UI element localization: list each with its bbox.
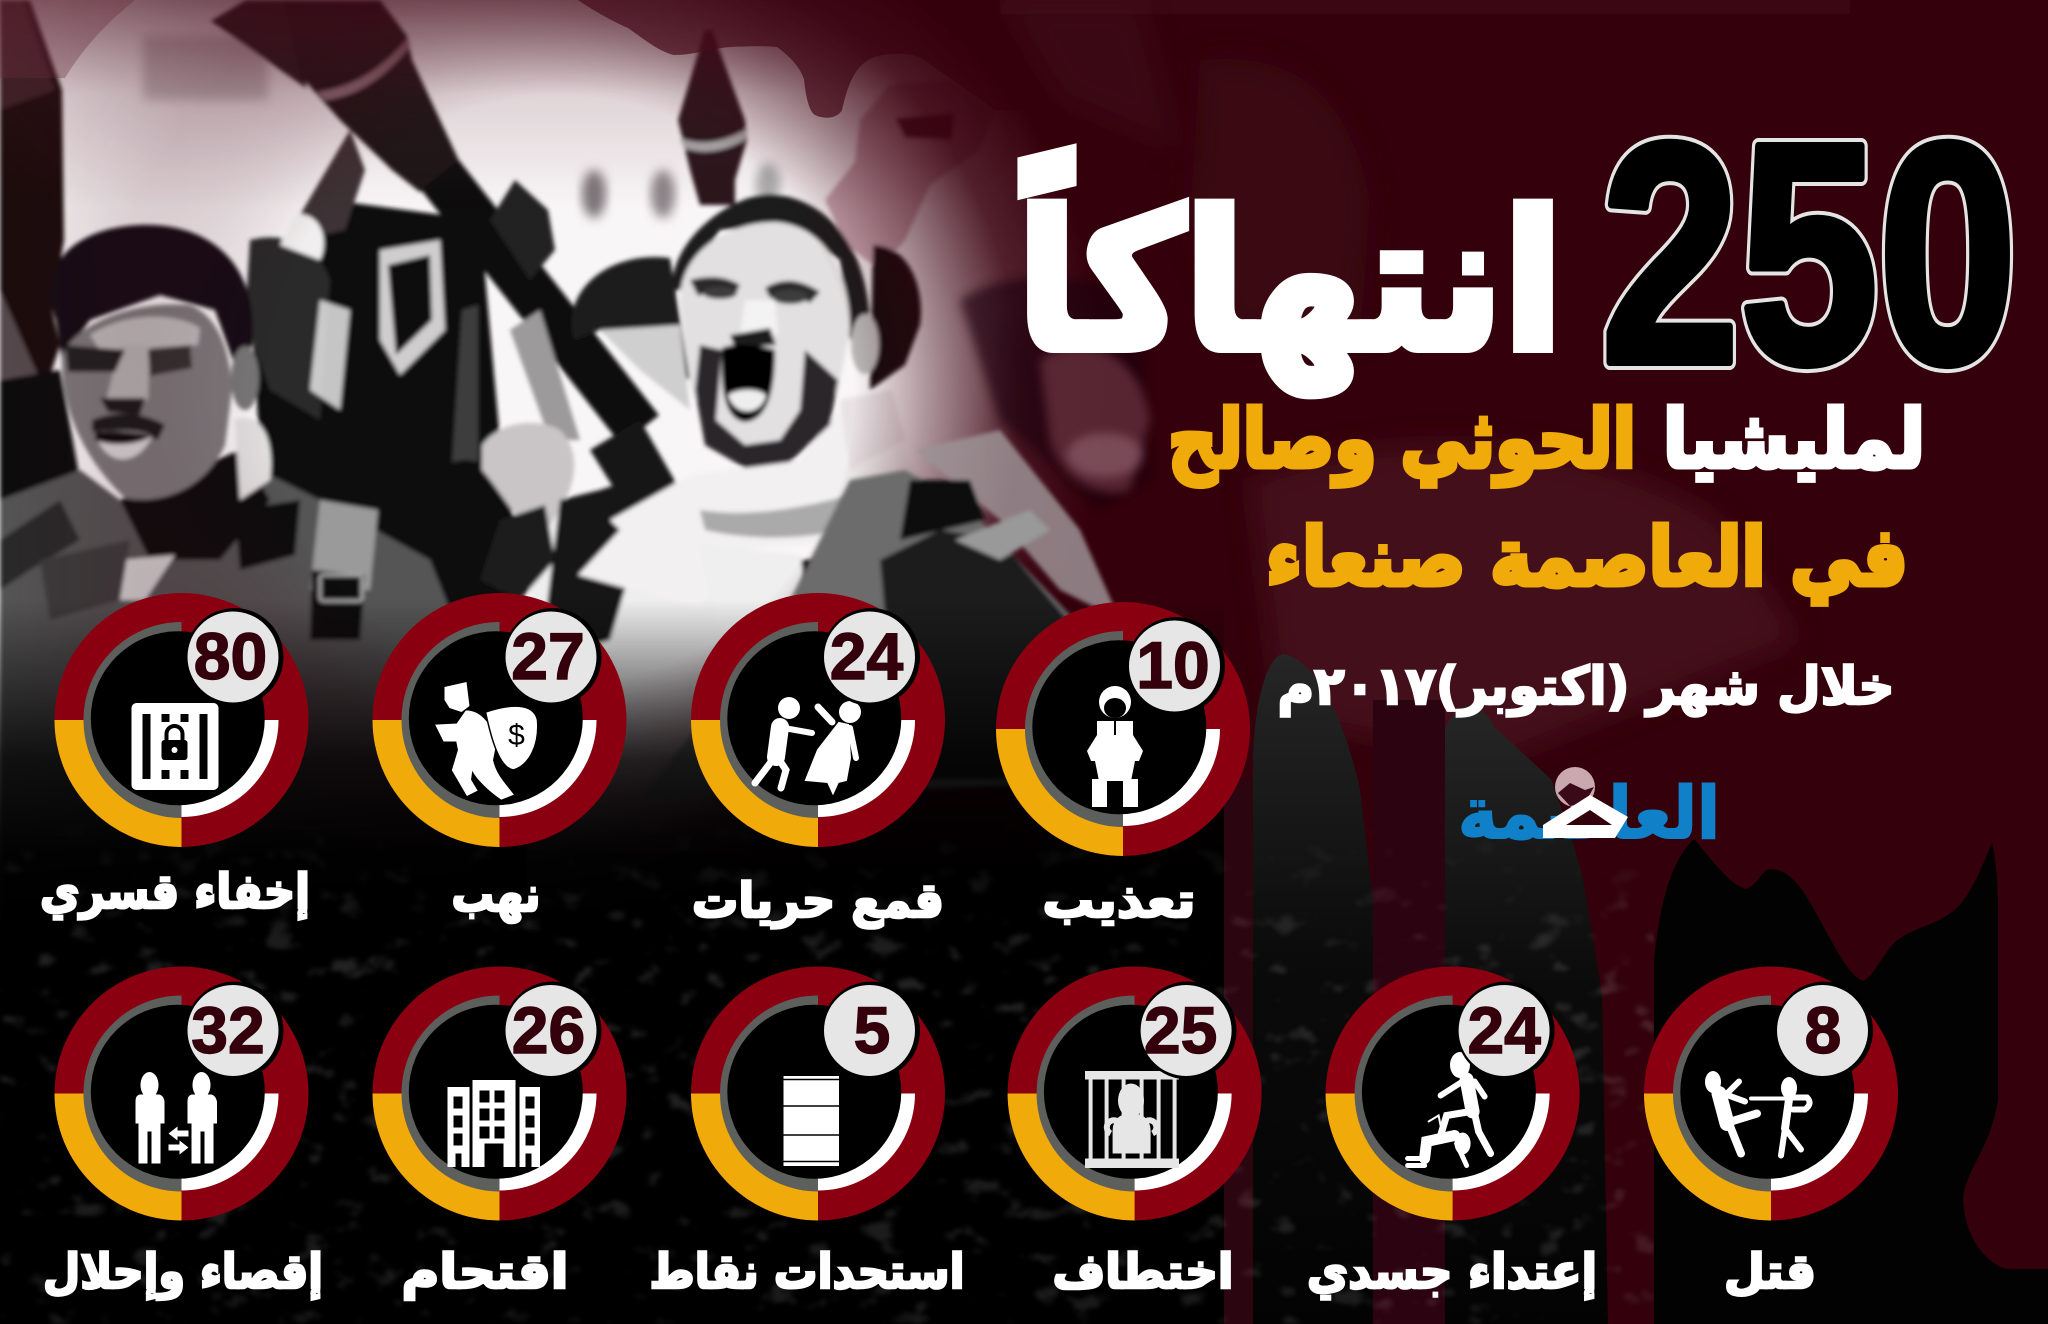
label: قمع حريات xyxy=(692,873,944,929)
icon: building xyxy=(448,1080,540,1167)
stat: suppressing freedoms 24 xyxy=(691,593,945,847)
side background glow below xyxy=(530,500,750,1000)
stat: enforced disappearance 80 xyxy=(54,593,308,847)
stat: kidnapping 25 xyxy=(1008,966,1262,1220)
number badge: 24 xyxy=(830,619,903,693)
number badge xyxy=(504,982,602,1080)
top lighter band xyxy=(1000,0,1850,14)
icon: two men exchanging xyxy=(136,1072,217,1164)
stat: killing 8 xyxy=(1644,966,1898,1220)
label: استحدات نقاط xyxy=(650,1244,964,1300)
left soldier body xyxy=(0,455,470,1000)
number badge xyxy=(1127,617,1225,715)
stat: exclusion and replacement 32 xyxy=(54,966,308,1220)
subtitle line one: الحوثي وصالح xyxy=(1168,393,1636,487)
date line: خلال شهر (اكتوبر)٢٠١٧م xyxy=(1278,657,1894,717)
stat: torture 10 xyxy=(996,602,1250,856)
stat: creating checkpoints 5 xyxy=(691,966,945,1220)
icon: barrel xyxy=(784,1076,839,1166)
number badge xyxy=(822,608,920,706)
icon: locked prison door xyxy=(132,703,218,790)
dark below man shirt left xyxy=(540,470,660,660)
icon: person kicking fallen person xyxy=(1408,1052,1491,1166)
number badge: 27 xyxy=(511,619,585,693)
number badge: 32 xyxy=(191,993,265,1067)
wall details xyxy=(143,36,268,100)
left soldier hair xyxy=(50,225,253,380)
subtitle line one: لمليشيا xyxy=(1663,393,1925,486)
RPG warhead xyxy=(284,0,461,192)
logo: العاصمة xyxy=(1458,771,1720,855)
label: اقتحام xyxy=(402,1244,568,1300)
number badge xyxy=(186,608,284,706)
RPG fin xyxy=(211,0,306,88)
label: تعذيب xyxy=(1042,873,1196,929)
center man head xyxy=(672,194,870,340)
number badge: 8 xyxy=(1805,993,1841,1067)
label: إقصاء وإحلال xyxy=(43,1244,323,1300)
grunge texture xyxy=(0,820,1654,1324)
left soldier face xyxy=(62,304,232,500)
stat: physical assault 24 xyxy=(1326,966,1580,1220)
raised fist and arm xyxy=(825,80,995,270)
label: إعتداء جسدي xyxy=(1307,1244,1597,1300)
icon: person tied to chair xyxy=(1087,686,1143,807)
strap and disc xyxy=(452,305,478,465)
number badge xyxy=(822,982,920,1080)
faded figures under title xyxy=(960,0,1800,760)
number badge xyxy=(1457,982,1555,1080)
number badge: 80 xyxy=(194,619,267,693)
title word: انتهاكاً xyxy=(1017,149,1563,395)
icon: person in cage xyxy=(1085,1071,1179,1168)
RPG tube xyxy=(440,175,640,430)
label: نهب xyxy=(452,867,540,923)
number badge: 25 xyxy=(1144,993,1217,1067)
middle rocket xyxy=(678,30,747,205)
scarf xyxy=(578,395,910,610)
icon: person shooting another xyxy=(1705,1071,1810,1156)
number badge xyxy=(1139,982,1237,1080)
icon: man assaulting woman xyxy=(755,697,861,793)
number badge: 26 xyxy=(512,993,585,1067)
number badge: 5 xyxy=(854,993,890,1067)
number badge: 24 xyxy=(1467,993,1541,1067)
icon: thief with money bag: $ xyxy=(508,719,525,752)
jacket of center man over overlay edge xyxy=(640,430,1150,800)
label: اختطاف xyxy=(1052,1244,1234,1300)
label: قتل xyxy=(1724,1244,1816,1300)
black lower band xyxy=(0,600,1224,1324)
label: إخفاء قسري xyxy=(40,864,310,920)
number badge xyxy=(1775,982,1873,1080)
blood drip strips and dark silhouettes xyxy=(1224,654,2048,1324)
number badge xyxy=(504,608,602,706)
stat: storming 26 xyxy=(372,966,626,1220)
center group behind xyxy=(0,200,530,1000)
behind hair xyxy=(870,245,921,390)
curly man behind xyxy=(572,257,690,380)
stat: looting 27 xyxy=(372,593,626,847)
left rocket xyxy=(0,0,64,425)
number badge: 10 xyxy=(1136,628,1210,702)
gripping hand xyxy=(482,423,574,540)
number badge xyxy=(186,982,284,1080)
icon: thief with money bag xyxy=(438,682,538,798)
subtitle line two: في العاصمة صنعاء xyxy=(1266,511,1908,604)
